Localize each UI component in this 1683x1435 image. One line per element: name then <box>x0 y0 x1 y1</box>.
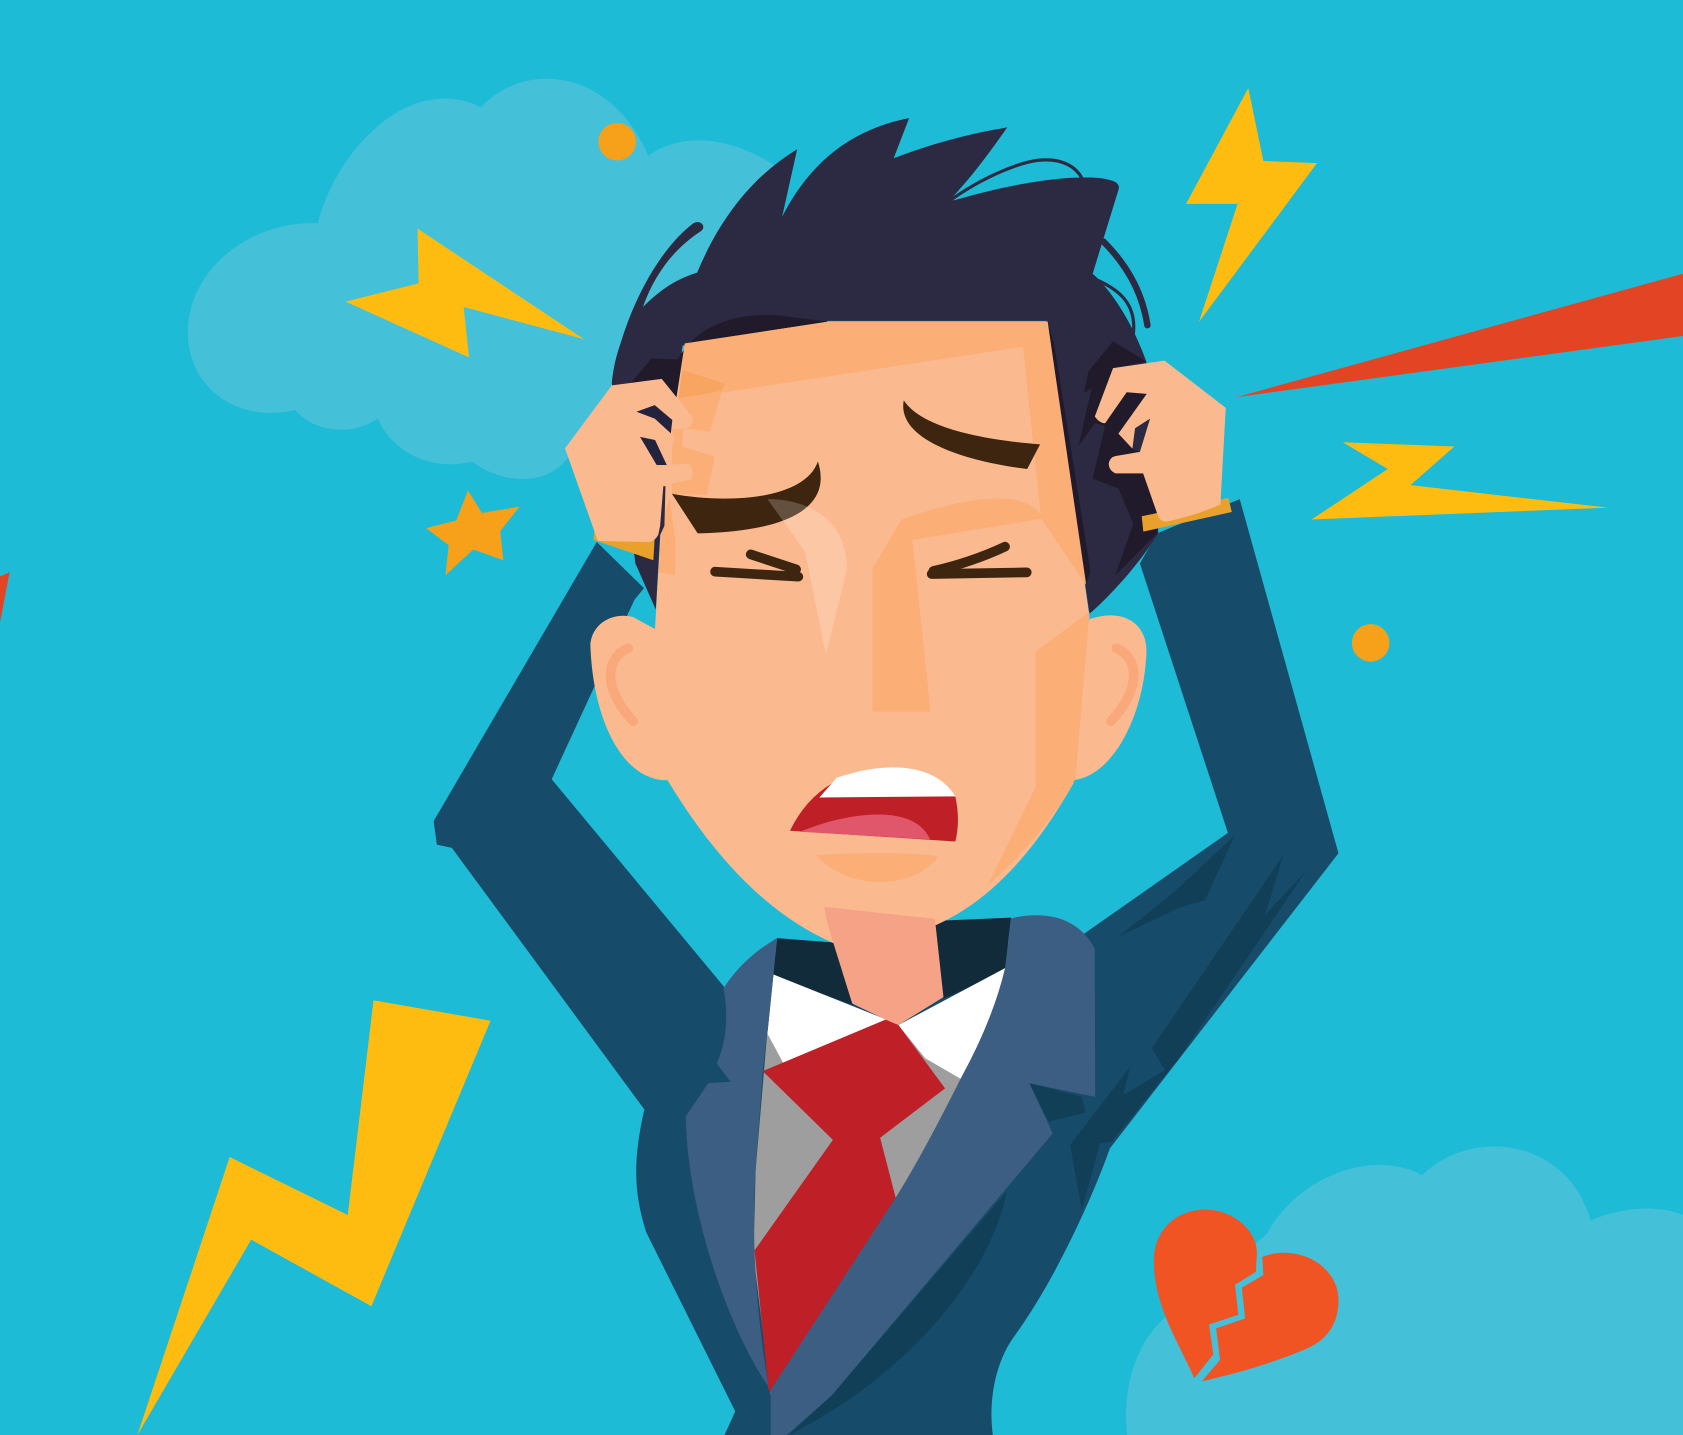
left hand <box>565 379 693 542</box>
cloud: lower right <box>1126 1146 1683 1435</box>
vest <box>753 1025 971 1395</box>
icon: lightning right <box>1312 442 1608 519</box>
icon: red spike right <box>1236 274 1683 397</box>
icon: large lightning lower left <box>137 1000 491 1435</box>
shirt collar <box>767 968 1007 1082</box>
eyes <box>715 547 1027 577</box>
cheek shade <box>987 612 1089 885</box>
left arm <box>434 542 741 1116</box>
tie <box>755 1020 945 1395</box>
forehead shade <box>678 322 1086 585</box>
right eyebrow <box>903 400 1040 469</box>
right arm <box>1073 499 1338 1159</box>
jacket body <box>636 934 1110 1435</box>
nose highlight <box>767 499 847 655</box>
icon: lightning on cloud <box>346 229 584 357</box>
figure: businessman <box>434 118 1338 1435</box>
right ear <box>1071 615 1146 780</box>
left lapel <box>686 938 777 1387</box>
left ear <box>590 616 671 780</box>
hair dark shading <box>630 315 1158 585</box>
icon: red spike left edge <box>0 572 10 623</box>
icon: star <box>426 490 519 575</box>
neck <box>824 907 943 1025</box>
jacket shadows <box>789 835 1307 1435</box>
icon: lightning top right <box>1186 88 1317 322</box>
hair <box>612 118 1159 614</box>
icon: dot top <box>598 123 636 160</box>
right hand <box>1095 361 1226 522</box>
left cuff <box>594 530 655 560</box>
chin shade <box>816 853 938 882</box>
left eyebrow <box>672 462 821 533</box>
icon: dot right <box>1352 624 1389 662</box>
shirt collar interior <box>773 918 1011 1005</box>
right lapel <box>771 915 1095 1435</box>
mouth <box>790 767 958 841</box>
nose shade <box>873 498 1043 712</box>
forehead patches <box>658 370 725 575</box>
right cuff <box>1142 498 1232 532</box>
cloud: upper left <box>188 79 784 479</box>
icon: broken heart <box>1154 1210 1338 1381</box>
hair strands <box>612 160 1147 383</box>
face <box>655 322 1089 943</box>
